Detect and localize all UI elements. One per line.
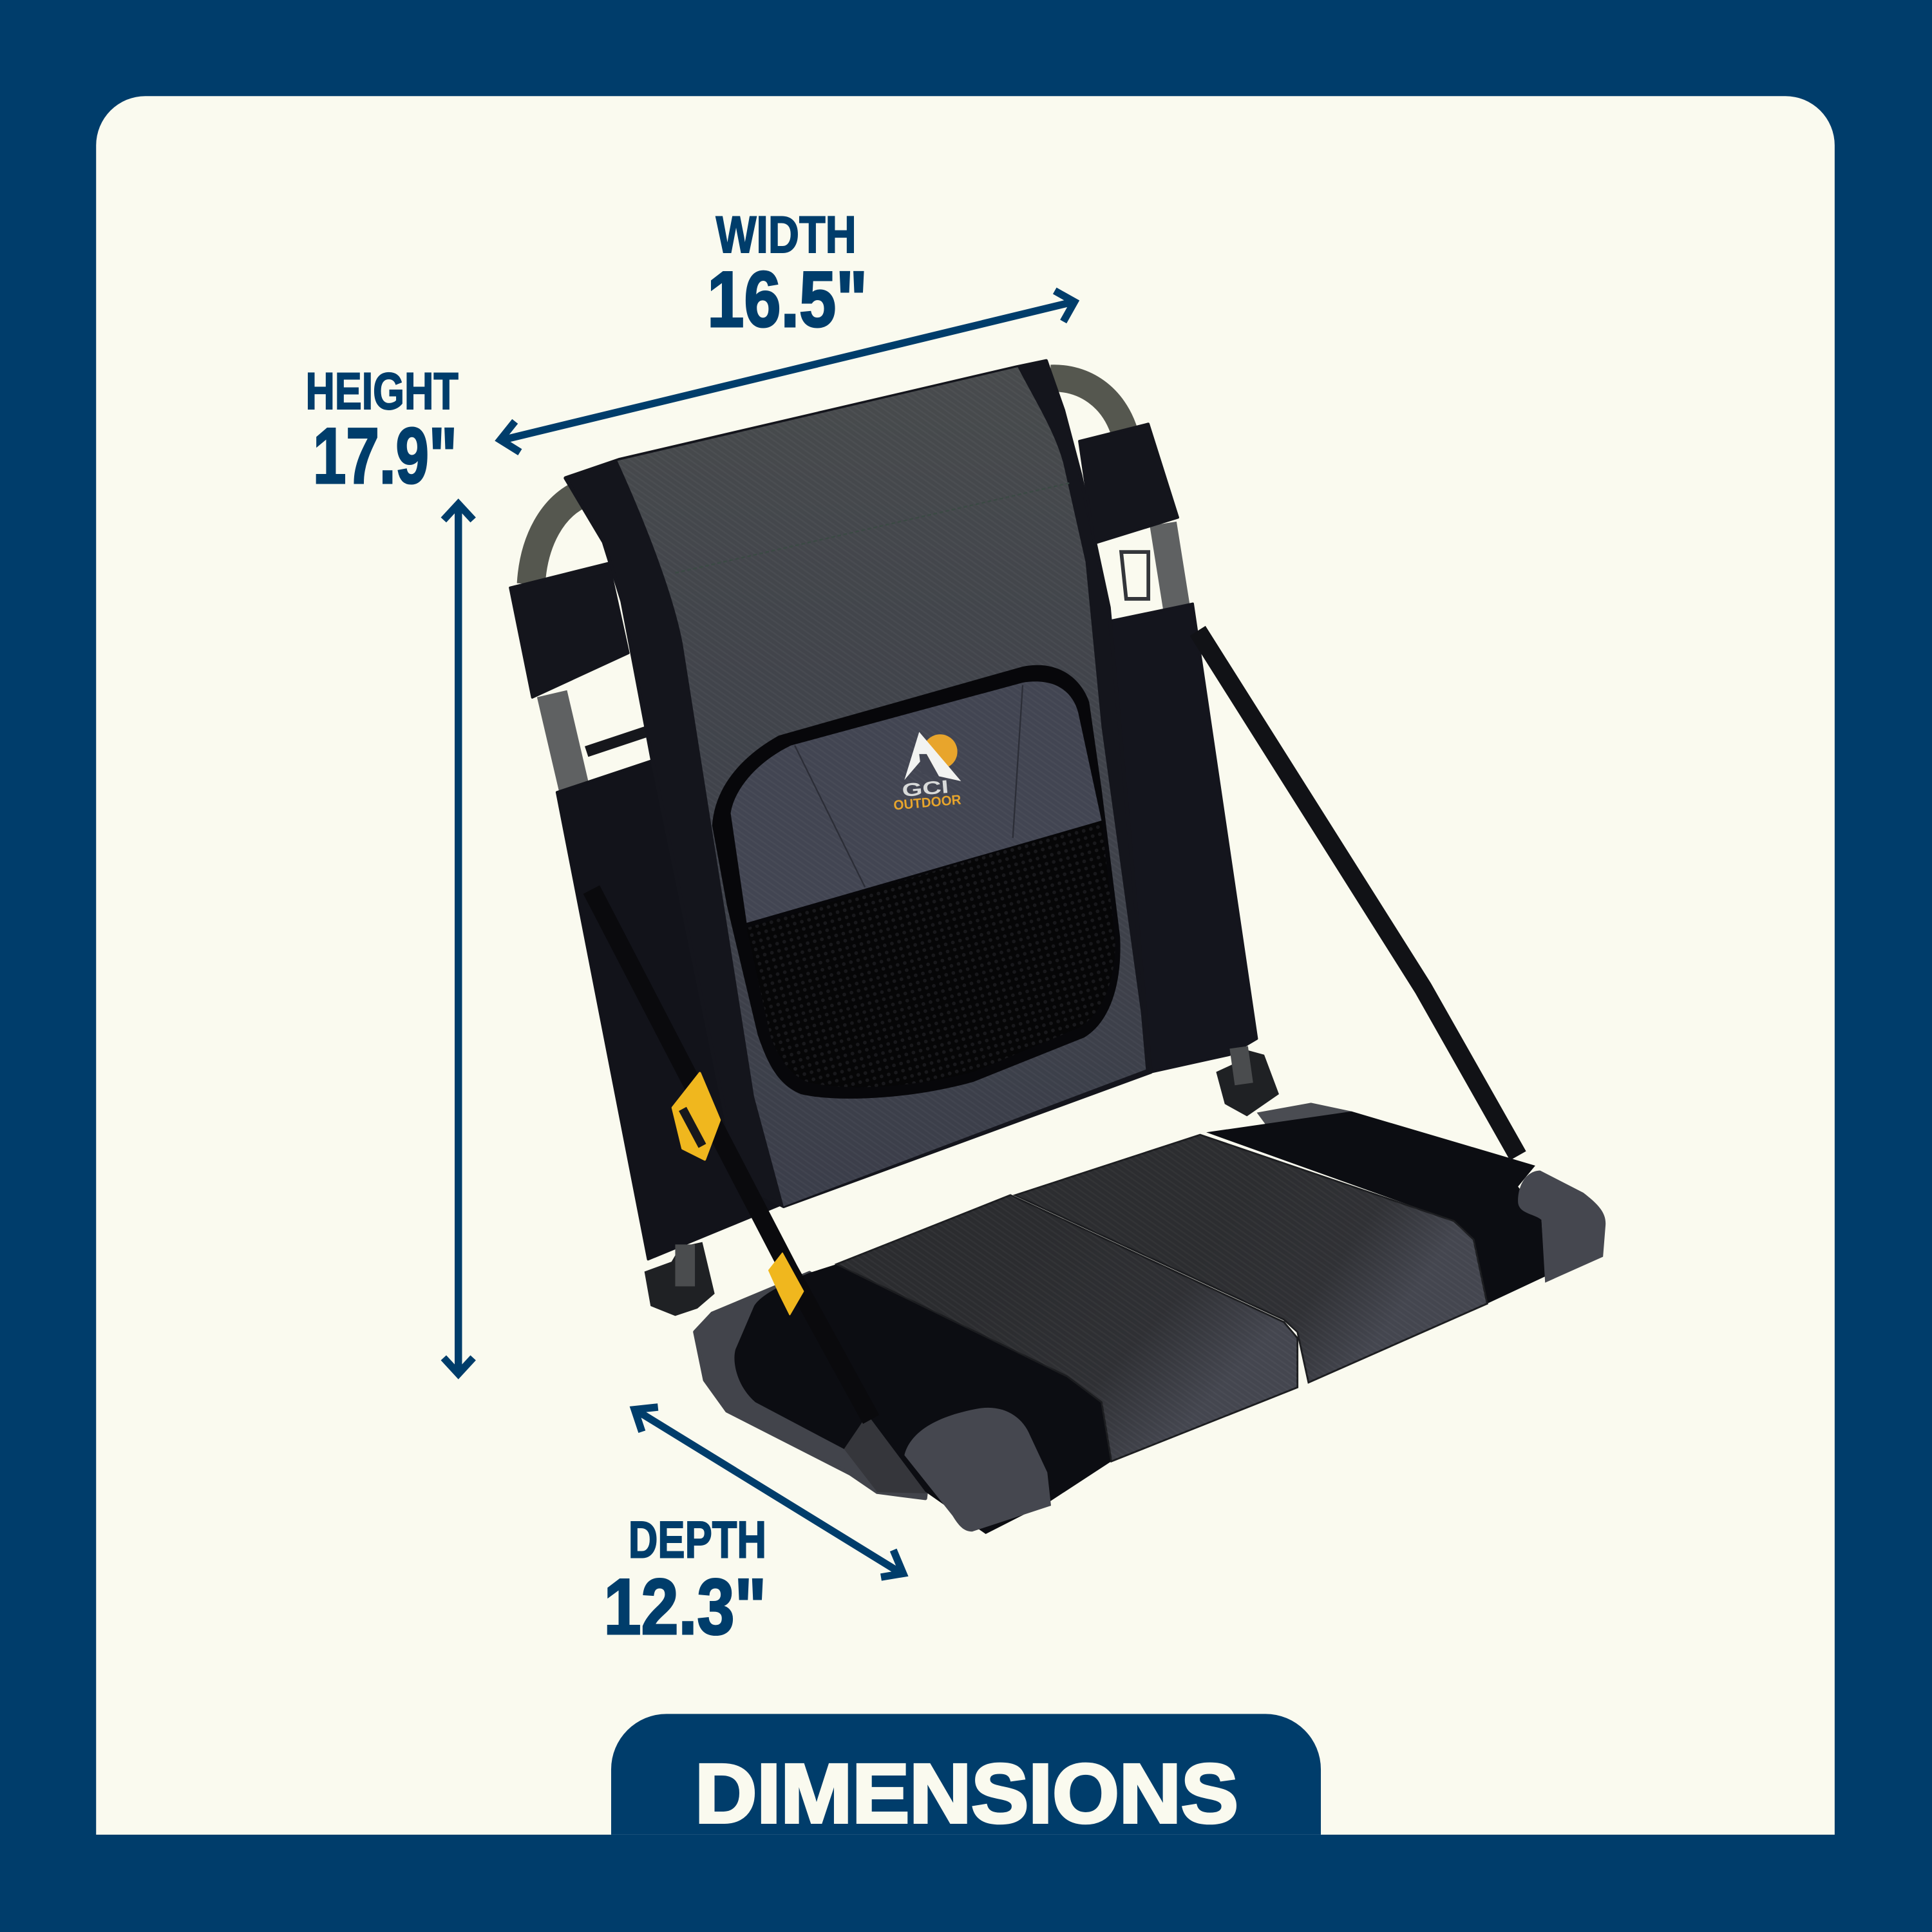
width label: WIDTH bbox=[716, 206, 857, 264]
brand logo bbox=[893, 732, 961, 813]
small strap behind the back bbox=[587, 730, 653, 752]
right sleeve bbox=[1079, 424, 1178, 544]
seat cushion rear bbox=[1016, 1135, 1487, 1383]
seat black base bbox=[1206, 1112, 1545, 1303]
depth label bbox=[603, 1511, 766, 1651]
yellow strap slider bbox=[769, 1253, 803, 1314]
chair product illustration bbox=[510, 361, 1605, 1534]
hinge brackets bbox=[645, 1046, 1279, 1316]
pocket outline bbox=[712, 665, 1121, 1099]
stitching line bbox=[675, 483, 1070, 573]
brand logo: OUTDOOR bbox=[893, 793, 961, 813]
lower right side panel of the back bbox=[1104, 604, 1257, 1073]
left support strap bbox=[591, 889, 871, 1419]
right support strap bbox=[1198, 631, 1518, 1156]
seat end caps bbox=[1518, 1171, 1605, 1283]
seat gray ends bbox=[695, 1273, 936, 1499]
mesh pocket bbox=[746, 820, 1115, 1087]
seat cushion front bbox=[837, 1195, 1298, 1461]
depth label: 12.3" bbox=[603, 1562, 766, 1651]
heading tab: dimensions bbox=[611, 1714, 1321, 1841]
charcoal back panel bbox=[618, 367, 1146, 1206]
width label bbox=[707, 206, 867, 343]
frame tubes bbox=[531, 378, 1177, 788]
depth arrow bbox=[634, 1407, 903, 1577]
height label bbox=[305, 363, 459, 500]
pocket lining bbox=[731, 681, 1101, 923]
width label: 16.5" bbox=[707, 255, 867, 343]
black edge bands of the back bbox=[565, 361, 1151, 1206]
heading tab: dimensions: DIMENSIONS bbox=[695, 1747, 1238, 1841]
left sleeve bbox=[510, 563, 629, 697]
brand logo: GCI bbox=[901, 777, 950, 801]
height label: 17.9" bbox=[313, 412, 457, 500]
yellow side buckle bbox=[673, 1073, 719, 1159]
height arrow bbox=[444, 504, 473, 1374]
lower left side panel of the back bbox=[557, 760, 788, 1259]
width arrow bbox=[500, 291, 1074, 452]
depth label: DEPTH bbox=[629, 1511, 766, 1569]
height label: HEIGHT bbox=[305, 363, 459, 421]
